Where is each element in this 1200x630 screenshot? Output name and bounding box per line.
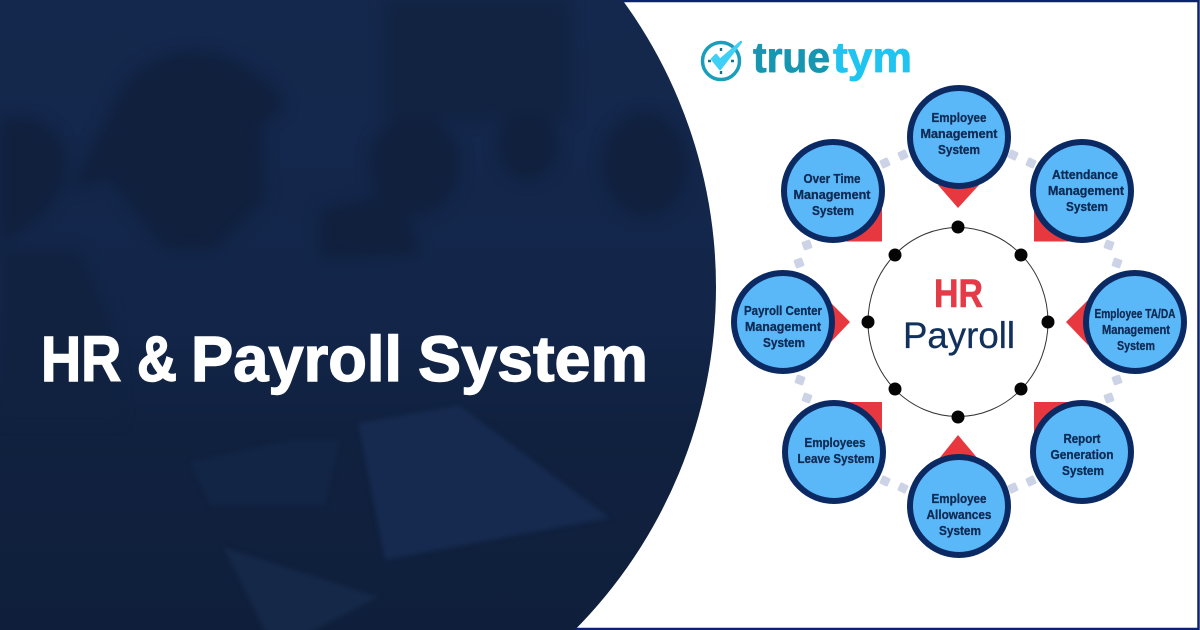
node: Employee Allowances System bbox=[910, 457, 1008, 555]
connector dots between nodes bbox=[793, 149, 1123, 494]
node: Report Generation System bbox=[1033, 403, 1131, 501]
node: Report Generation System: System bbox=[1062, 463, 1104, 478]
node: Employee TA/DA Management System: System bbox=[1117, 338, 1155, 353]
logo wordmark: true bbox=[753, 34, 830, 82]
red pointers bbox=[828, 185, 1088, 460]
node: Employee Allowances System: Employee bbox=[932, 491, 986, 506]
node: Attendance Management System: Attendance bbox=[1052, 167, 1118, 182]
node: Employee Management System: Employee bbox=[932, 110, 986, 125]
node: Report Generation System: Report bbox=[1064, 431, 1101, 446]
node: Attendance Management System: System bbox=[1066, 199, 1108, 214]
node: Payroll Center Management System: Payroll Center bbox=[744, 303, 822, 318]
node: Employees Leave System: Employees bbox=[804, 435, 866, 450]
center label: Payroll: Payroll bbox=[903, 315, 1015, 356]
logo wordmark accent: tym bbox=[833, 34, 912, 82]
title: HR & bbox=[41, 323, 177, 395]
center ring with dots bbox=[862, 220, 1054, 424]
node: Report Generation System: Generation bbox=[1050, 447, 1114, 462]
node: Employees Leave System: Leave System bbox=[798, 451, 874, 466]
node: Over Time Management System: Over Time bbox=[804, 171, 860, 186]
node: Employee Management System bbox=[910, 88, 1008, 186]
title bbox=[41, 323, 648, 395]
node: Employee Allowances System: Allowances bbox=[926, 507, 992, 522]
node: Payroll Center Management System: System bbox=[763, 335, 805, 350]
node: Over Time Management System bbox=[784, 142, 882, 240]
node: Payroll Center Management System: Management bbox=[745, 319, 822, 334]
title: System bbox=[418, 323, 648, 395]
logo: truetym bbox=[702, 34, 912, 82]
node: Attendance Management System: Management bbox=[1048, 183, 1125, 198]
frame border bbox=[570, 1, 1198, 629]
title: Payroll bbox=[191, 323, 402, 395]
icon: clock with check mark bbox=[702, 42, 741, 80]
node: Employee Allowances System: System bbox=[939, 523, 981, 538]
center label: HR: HR bbox=[934, 272, 983, 316]
panel: dark photo circle bbox=[0, 0, 730, 630]
node: Payroll Center Management System bbox=[734, 273, 832, 371]
node: Employee TA/DA Management System: Management bbox=[1102, 322, 1171, 337]
node: Attendance Management System bbox=[1033, 142, 1131, 240]
node: Employee TA/DA Management System: Employee TA/DA bbox=[1094, 306, 1176, 321]
node: Over Time Management System: System bbox=[812, 203, 854, 218]
node: Employee TA/DA Management System bbox=[1086, 273, 1184, 371]
node: Employees Leave System bbox=[785, 403, 883, 501]
node: Employee Management System: System bbox=[938, 142, 980, 157]
node: Employee Management System: Management bbox=[920, 126, 998, 141]
node: Over Time Management System: Management bbox=[794, 187, 871, 202]
